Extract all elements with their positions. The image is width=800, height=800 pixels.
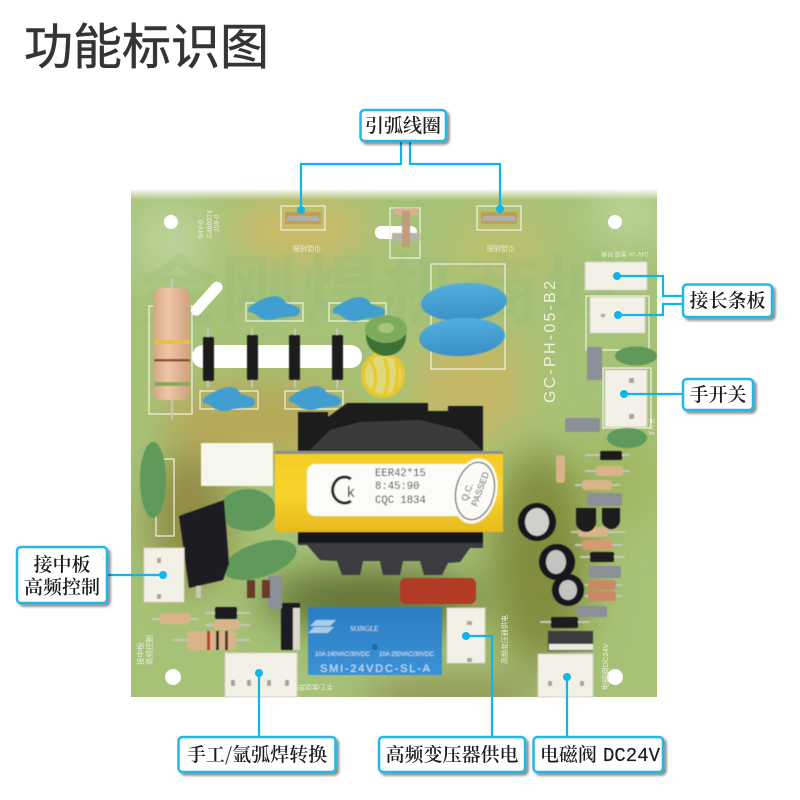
connector X3	[447, 608, 485, 663]
FU1 fuse terminal	[392, 208, 420, 247]
transformer: EER42*15	[375, 468, 426, 480]
diodes	[203, 328, 343, 388]
transformer: Q.C.	[459, 482, 475, 502]
green winding wire behind transformer	[220, 489, 276, 531]
silkscreen text and outlines: 电磁阀DC24V	[600, 643, 610, 690]
transformer: PASSED	[469, 470, 491, 508]
green toroid and yellow coil	[363, 315, 407, 396]
transformer: CQC 1834	[375, 495, 426, 507]
leader: long board	[613, 272, 684, 319]
relay: 10A 240VAC/30VDC	[315, 652, 371, 658]
label: 手工/氩弧焊转换: 手工/氩弧焊转换	[187, 740, 327, 767]
label: 手开关: 手开关	[689, 380, 747, 407]
relay: 10A 250VAC/30VDC	[379, 652, 435, 658]
silkscreen text and outlines: 24V 0V 氩弧 转换	[601, 250, 648, 258]
label: 引弧线圈: 引弧线圈	[365, 111, 441, 138]
silkscreen text and outlines: 接中板	[135, 642, 145, 665]
connector X2	[225, 653, 297, 697]
panel: green PCB	[130, 190, 670, 720]
right axial resistors and diodes	[540, 451, 630, 628]
leader: TIG switch	[255, 669, 263, 736]
label: 电磁阀 DC24V	[534, 737, 663, 772]
label: 接中板 高频控制	[17, 547, 107, 603]
green varistors	[140, 346, 657, 588]
connector X4	[538, 654, 593, 697]
title: 功能标识图	[24, 8, 269, 79]
resistor R1	[153, 278, 190, 420]
connector X5	[585, 262, 647, 290]
blue disc capacitors	[203, 296, 385, 411]
silkscreen text and outlines: 手开关	[648, 418, 656, 436]
white insulator block	[201, 443, 273, 486]
label: 手工/氩弧焊转换	[178, 737, 336, 772]
silkscreen text and outlines: 高频控制	[144, 635, 154, 665]
silkscreen text and outlines: 94V-0	[198, 220, 205, 238]
CP1 terminal	[285, 212, 321, 224]
silkscreen text and outlines: 高频变压器供电	[500, 615, 509, 664]
large blue capacitors	[418, 281, 508, 358]
label: 接中板 高频控制: 接中板	[33, 550, 91, 577]
grey film capacitors	[565, 347, 622, 617]
silkscreen text and outlines: J08-0	[214, 214, 221, 232]
silkscreen text and outlines: 手工/氩弧焊转换	[285, 683, 333, 692]
leader: middle board	[107, 571, 167, 579]
transformer: 8:45:90	[375, 481, 420, 493]
left axial components	[152, 576, 282, 650]
connector X6	[590, 297, 645, 333]
leader: arc coil	[297, 140, 504, 214]
CP2 terminal	[481, 212, 517, 224]
relay: SMI-24VDC-SL-A	[320, 663, 431, 675]
mounting holes and slots	[164, 215, 623, 685]
black heat sink	[179, 500, 229, 598]
leader: transformer supply	[462, 632, 492, 736]
silkscreen text and outlines: 引弧线圈	[293, 244, 321, 253]
silkscreen text and outlines: E486074	[207, 210, 214, 238]
callout lines and dots	[107, 140, 684, 736]
transformer: k	[347, 484, 355, 501]
silkscreen text and outlines	[135, 206, 656, 692]
leader: solenoid valve	[563, 673, 571, 736]
label: 接中板 高频控制: 高频控制	[24, 572, 100, 600]
red film capacitor	[400, 578, 476, 604]
leader: hand switch	[620, 390, 683, 398]
connector X7	[605, 370, 647, 427]
label: 电磁阀 DC24V: DC24V	[603, 745, 661, 767]
transformer	[275, 403, 503, 575]
electrolytic capacitors	[518, 503, 584, 606]
relay: SONGLE	[350, 624, 379, 633]
silkscreen text and outlines: 引弧线圈	[487, 244, 515, 253]
label: 接长条板: 接长条板	[689, 286, 766, 313]
circuit board photo	[130, 190, 670, 720]
label: 高频变压器供电: 高频变压器供电	[385, 740, 519, 767]
label: 电磁阀 DC24V: 电磁阀	[540, 740, 597, 767]
small black regulator	[281, 603, 300, 650]
connector X1	[144, 548, 184, 602]
relay	[308, 607, 442, 675]
watermark: 金刚焊机商城	[140, 230, 620, 340]
silkscreen text and outlines: GC-PH-05-B2	[542, 281, 559, 403]
transistors	[548, 508, 620, 651]
